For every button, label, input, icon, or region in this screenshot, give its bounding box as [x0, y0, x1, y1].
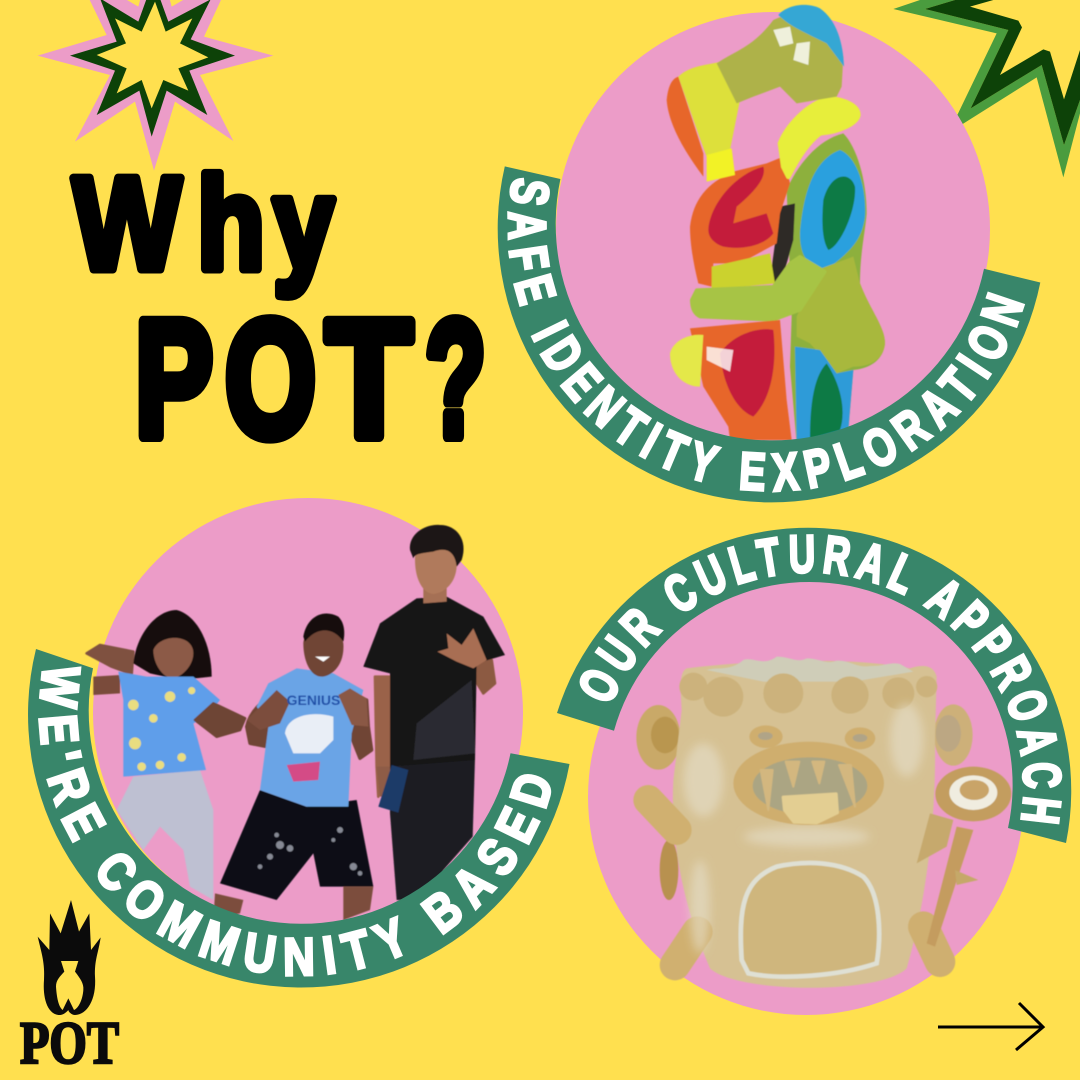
pot body [673, 661, 937, 988]
logo: POT crown and vase [20, 900, 119, 1076]
green curved band [557, 528, 1071, 843]
pink circle [556, 12, 990, 446]
pot mouth [733, 742, 884, 825]
pot arm [648, 800, 677, 830]
heading word: Why: W [73, 150, 181, 297]
pink circle [93, 498, 523, 928]
pot legs [675, 927, 940, 965]
heading word: POT?: ? [425, 287, 486, 472]
curved label: WE'RE COMMUNITY BASED [38, 666, 552, 977]
middle boy [213, 613, 373, 920]
logo mark [38, 900, 101, 1015]
image: three young people posing [87, 525, 505, 920]
icon: pink and green starburst top left [38, 0, 273, 171]
title: Why POT? [73, 150, 486, 472]
curved label: SAFE IDENTITY EXPLORATION [507, 178, 1026, 493]
pot ears [636, 704, 973, 900]
middle boy: GENIUS [287, 692, 340, 708]
flower [917, 767, 1011, 947]
heading word: Why: h [197, 150, 265, 297]
icon: green starburst top right [893, 0, 1080, 177]
panel: we're community based [28, 498, 570, 988]
green curved band [498, 166, 1040, 502]
pot belly [741, 863, 879, 977]
pot rim [707, 657, 913, 682]
curved label: OUR CULTURAL APPROACH [580, 534, 1062, 824]
image: ceramic monster pot [636, 657, 1011, 988]
girl [87, 610, 245, 900]
heading word: POT?: T [326, 287, 412, 472]
green curved band [28, 649, 569, 988]
panel: safe identity exploration [498, 4, 1040, 502]
tall boy [363, 525, 505, 900]
pot eyes [749, 725, 875, 749]
heading word: POT?: O [225, 287, 316, 472]
arrow [938, 1003, 1043, 1050]
heading word: POT?: P [135, 287, 213, 472]
heading word: Why: y [273, 150, 334, 297]
panel: our cultural approach [557, 528, 1072, 1015]
pink circle [588, 579, 1024, 1015]
image: glazed ceramic embracing figures [667, 5, 885, 443]
logo wordmark: POT [20, 1010, 119, 1076]
